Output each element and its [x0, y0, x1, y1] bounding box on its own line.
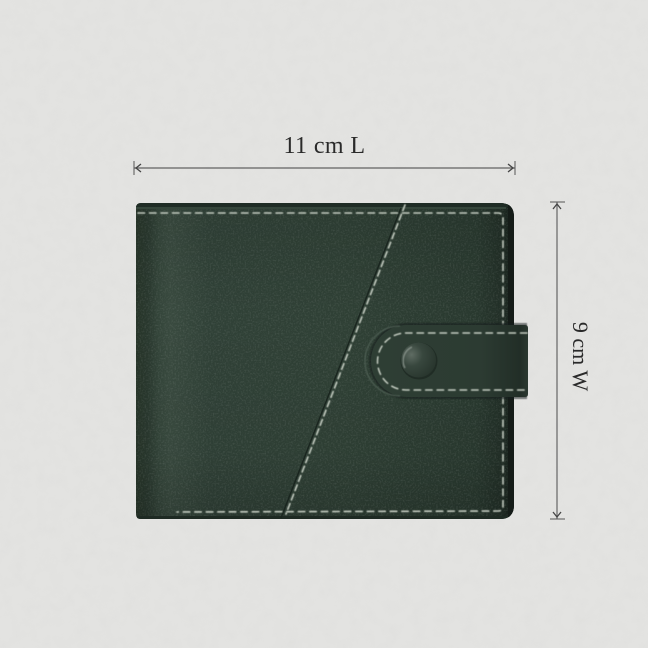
height dimension arrow	[550, 202, 565, 519]
outer stitching	[138, 213, 503, 512]
wallet	[136, 203, 528, 519]
strap rim highlight	[365, 326, 400, 396]
diagonal stitching	[286, 205, 405, 514]
clasp strap	[371, 325, 528, 397]
strap stitching	[378, 333, 527, 390]
snap button	[400, 342, 438, 380]
width label: 11 cm L	[284, 133, 365, 159]
height label: 9 cm W	[568, 322, 593, 391]
wallet body	[136, 203, 514, 519]
diagonal seam	[281, 208, 401, 518]
width dimension arrow	[134, 161, 515, 175]
strap shadow	[369, 323, 527, 399]
